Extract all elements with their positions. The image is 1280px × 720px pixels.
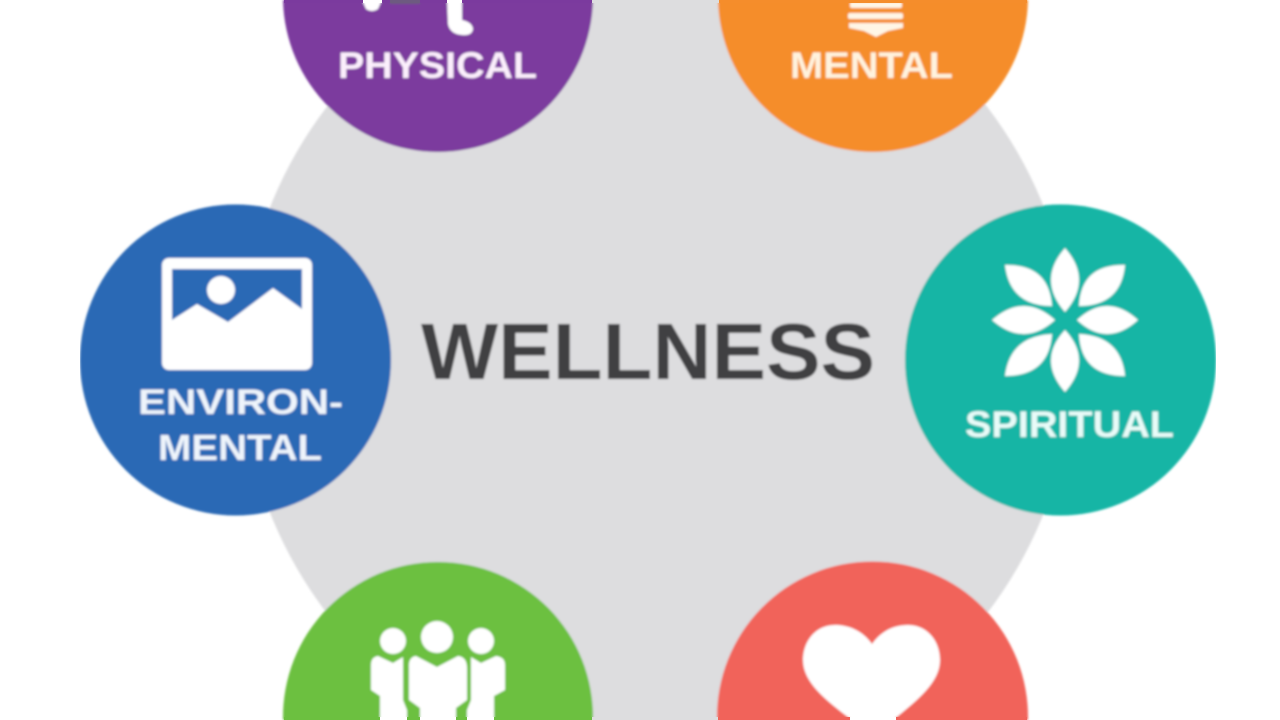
panel: environmental [80,204,391,516]
icon: heart [803,625,940,720]
panel: emotional [717,561,1028,720]
icon: group of people [371,621,505,720]
central grey circle [241,0,1073,720]
icon: light bulb base [848,2,903,37]
label: physical: PHYSICAL [338,45,537,86]
label: spiritual: SPIRITUAL [965,404,1174,445]
icon: physical figure [362,0,473,35]
panel: spiritual [905,204,1216,516]
label: environ-: ENVIRON- [138,383,343,422]
title: wellness: WELLNESS [421,307,875,396]
panel: social [283,562,593,720]
icon: landscape picture [162,258,312,370]
panel: physical [283,0,593,152]
label: mental: MENTAL [158,427,322,468]
panel: mental [718,0,1028,152]
icon: flower [992,248,1138,392]
label: mental: MENTAL [790,45,953,86]
